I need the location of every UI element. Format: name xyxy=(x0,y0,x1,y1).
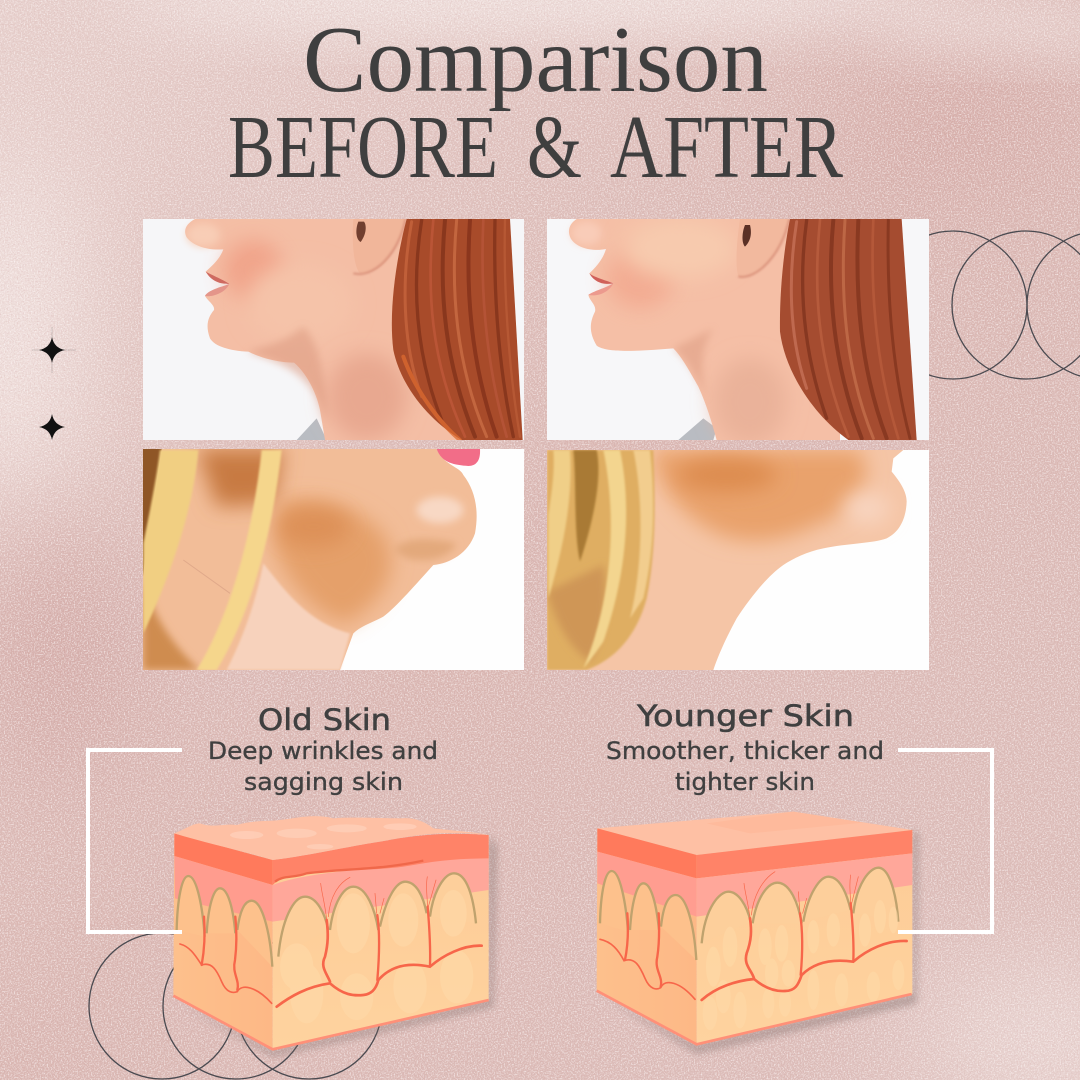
connector bracket: old skin xyxy=(88,750,182,932)
photo: after chin, blonde hair xyxy=(540,450,929,670)
title xyxy=(228,8,843,197)
title: Comparison xyxy=(303,8,768,112)
title: BEFORE xyxy=(228,98,498,197)
connector bracket: younger skin xyxy=(898,750,992,932)
skin diagram: younger skin block xyxy=(597,812,918,1053)
decorative circles: bottom left xyxy=(89,933,382,1079)
photo: before profile, red hair xyxy=(143,219,524,440)
icon: sparkle lower xyxy=(39,414,65,440)
text: old skin description: Deep wrinkles and xyxy=(208,737,438,765)
heading: younger skin: Younger Skin xyxy=(636,699,854,733)
title: & xyxy=(527,98,582,197)
photo: before chin, blonde hair xyxy=(140,449,524,670)
icon: sparkle upper xyxy=(32,327,76,373)
title: AFTER xyxy=(610,98,843,197)
text: younger skin description: tighter skin xyxy=(675,768,815,796)
text: younger skin description: Smoother, thicker and xyxy=(606,737,884,765)
text: old skin description: sagging skin xyxy=(244,768,403,796)
heading: old skin: Old Skin xyxy=(258,703,391,737)
decorative circles: top right xyxy=(879,231,1080,379)
text: younger skin description xyxy=(606,737,884,796)
photo: after profile, red hair xyxy=(547,218,929,445)
skin diagram: old skin block xyxy=(173,816,497,1057)
text: old skin description xyxy=(208,737,438,796)
